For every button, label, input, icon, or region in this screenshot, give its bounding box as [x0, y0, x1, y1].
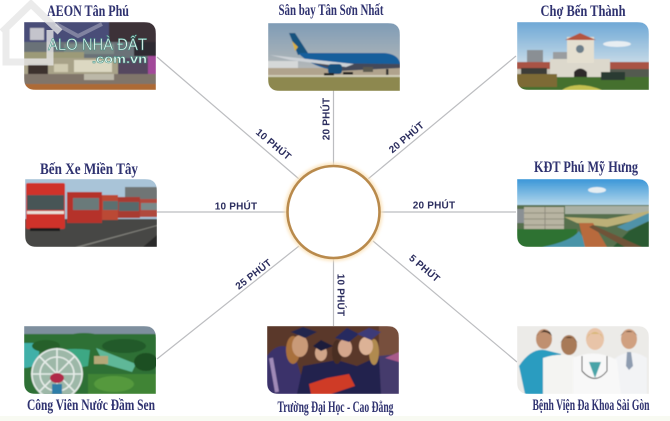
time labels: 10 PHÚT	[215, 200, 257, 212]
panel: KDT Phu My Hung	[517, 159, 649, 247]
panel: Cho Ben Thanh	[517, 3, 649, 90]
panel: Benh Vien Da Khoa Sai Gon	[517, 326, 650, 414]
time labels: 20 PHÚT	[413, 198, 455, 212]
watermark text: .com.vn	[92, 52, 147, 66]
panel: Cong Vien Nuoc Dam Sen	[24, 326, 158, 414]
panel: Ben Xe Mien Tay	[25, 161, 157, 247]
panel: San bay Tan Son Nhat: Sân bay Tân Sơn Nhất	[278, 2, 384, 19]
panel: Cong Vien Nuoc Dam Sen: Công Viên Nước Đầm Sen	[27, 397, 155, 414]
panel: AEON Tan Phu	[24, 3, 156, 90]
watermark text: ALO NHÀ ĐẤT	[48, 35, 147, 54]
icon: house	[2, 4, 60, 62]
time labels	[215, 98, 455, 316]
panel: San bay Tan Son Nhat	[268, 2, 400, 91]
panel: KDT Phu My Hung: KĐT Phú Mỹ Hưng	[534, 159, 638, 176]
panel: AEON Tan Phu: AEON Tân Phú	[47, 3, 129, 20]
time labels: 10 PHÚT	[253, 126, 294, 163]
panel: Truong Dai Hoc - Cao Dang	[267, 326, 399, 416]
photo: water park	[24, 326, 158, 400]
time labels: 5 PHÚT	[406, 251, 443, 285]
connector lines	[157, 56, 517, 362]
photo: market	[517, 22, 649, 90]
photo: airplane	[268, 23, 400, 91]
photo: graduates	[267, 326, 399, 394]
time labels: 25 PHÚT	[233, 256, 274, 292]
panel: Truong Dai Hoc - Cao Dang: Trường Đại Học - Cao Đẳng	[278, 399, 394, 416]
photo: mall at night	[24, 22, 156, 90]
photo: buses	[25, 179, 157, 247]
watermark text	[48, 35, 147, 66]
watermark: ALO NHA DAT	[2, 4, 147, 66]
time labels: 10 PHÚT	[334, 274, 348, 316]
panel: Cho Ben Thanh: Chợ Bến Thành	[540, 3, 626, 20]
time labels: 20 PHÚT	[386, 119, 427, 156]
bottom tint strip	[0, 416, 670, 421]
time labels: 20 PHÚT	[320, 98, 332, 140]
center circle	[286, 165, 380, 259]
photo: doctors	[517, 326, 649, 394]
panel: Ben Xe Mien Tay: Bến Xe Miền Tây	[40, 161, 138, 178]
photo: city aerial	[517, 179, 649, 247]
watermark roof over photo	[56, 24, 102, 36]
